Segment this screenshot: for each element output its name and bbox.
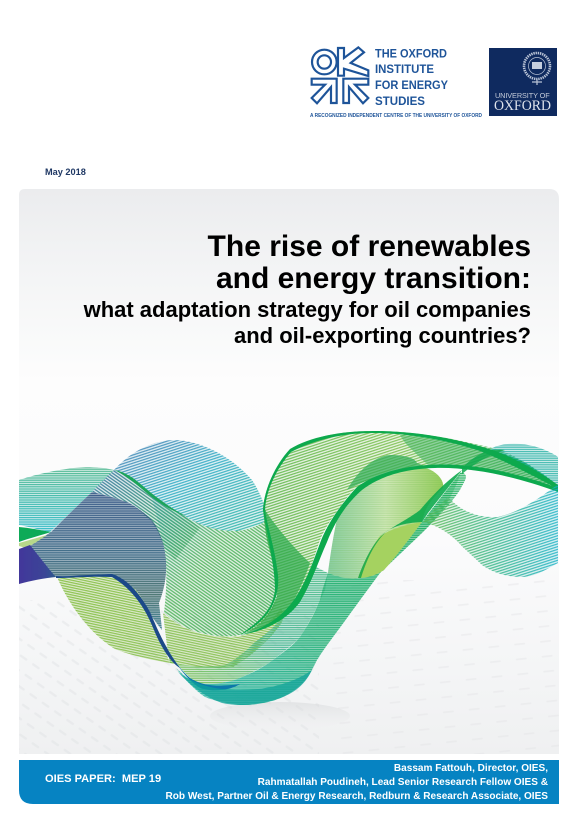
ribbon: central green lines — [150, 492, 277, 636]
logo tagline: A RECOGNIZED INDEPENDENT CENTRE OF THE UNIVERSITY OF OXFORD — [310, 113, 482, 119]
ribbon: upper arc outer edge — [240, 431, 558, 635]
ribbon: ascending green-teal band — [176, 472, 466, 705]
panel: cover artwork — [19, 189, 559, 754]
title: The rise of renewables — [208, 230, 531, 263]
ribbon: dark overlap tone — [30, 492, 166, 630]
logo: University of Oxford: OXFORD — [494, 98, 551, 114]
ribbon: big upper arc — [240, 431, 558, 635]
authors: Rob West, Partner Oil & Energy Research, Redburn & Research Associate, OIES — [166, 791, 548, 802]
logo: University of Oxford — [489, 48, 557, 116]
logo wordmark: STUDIES — [375, 94, 425, 108]
authors: Bassam Fattouh, Director, OIES, — [394, 763, 548, 774]
ribbon: lower-centre lime lines — [163, 608, 283, 668]
date: May 2018 — [45, 167, 86, 177]
ribbon: left teal lobe — [19, 467, 114, 532]
ribbon: teal bottom shade — [163, 637, 240, 690]
footer bar — [19, 760, 559, 804]
ribbon: lower dark-green overlap in arc — [240, 507, 310, 635]
icon: university seal — [524, 53, 550, 85]
subtitle: what adaptation strategy for oil companies — [83, 297, 531, 322]
ribbon: solid green left band — [19, 527, 51, 542]
ribbon: green edge of top lobe — [114, 470, 186, 516]
paper number: OIES PAPER: MEP 19 — [45, 773, 161, 785]
logo wordmark: INSTITUTE — [375, 62, 434, 76]
ribbon: right teal lobe — [423, 484, 558, 577]
ribbon: navy edge — [56, 574, 180, 668]
ribbon: top blue-teal lobe — [114, 440, 268, 531]
ribbon: right upper teal tip — [490, 444, 558, 485]
logo wordmark: THE OXFORD — [375, 46, 447, 60]
ribbon: wave graphic — [19, 431, 558, 705]
logo: Oxford Institute for Energy Studies — [310, 46, 482, 119]
ribbon: small lime wedge — [19, 535, 47, 548]
logo wordmark — [375, 46, 448, 108]
ribbon: crossing thin band — [380, 470, 462, 536]
ribbon: dark overlap — [30, 492, 166, 630]
ribbon: lime leaf — [358, 522, 422, 578]
icon: OIES emblem — [312, 47, 368, 103]
ribbon: mid overlap blue-green — [92, 470, 200, 560]
ribbon: upper second lobe — [347, 455, 427, 490]
subtitle: and oil-exporting countries? — [234, 323, 531, 348]
logo wordmark: FOR ENERGY — [375, 78, 448, 92]
ribbon: green cross over — [462, 450, 505, 474]
ribbon: lined teal swoop band — [166, 565, 328, 684]
ribbon shadow — [216, 702, 344, 711]
authors: Rahmatallah Poudineh, Lead Senior Research Fellow OIES & — [258, 777, 548, 788]
ribbon: purple band — [19, 545, 56, 584]
ribbon: lime lower lobe — [57, 574, 170, 663]
text: University of Oxford: UNIVERSITY OF — [495, 91, 550, 100]
title: and energy transition: — [216, 262, 531, 295]
ribbon: upper arc inner edge — [240, 464, 558, 635]
ribbon: centre lime fill — [328, 468, 443, 579]
